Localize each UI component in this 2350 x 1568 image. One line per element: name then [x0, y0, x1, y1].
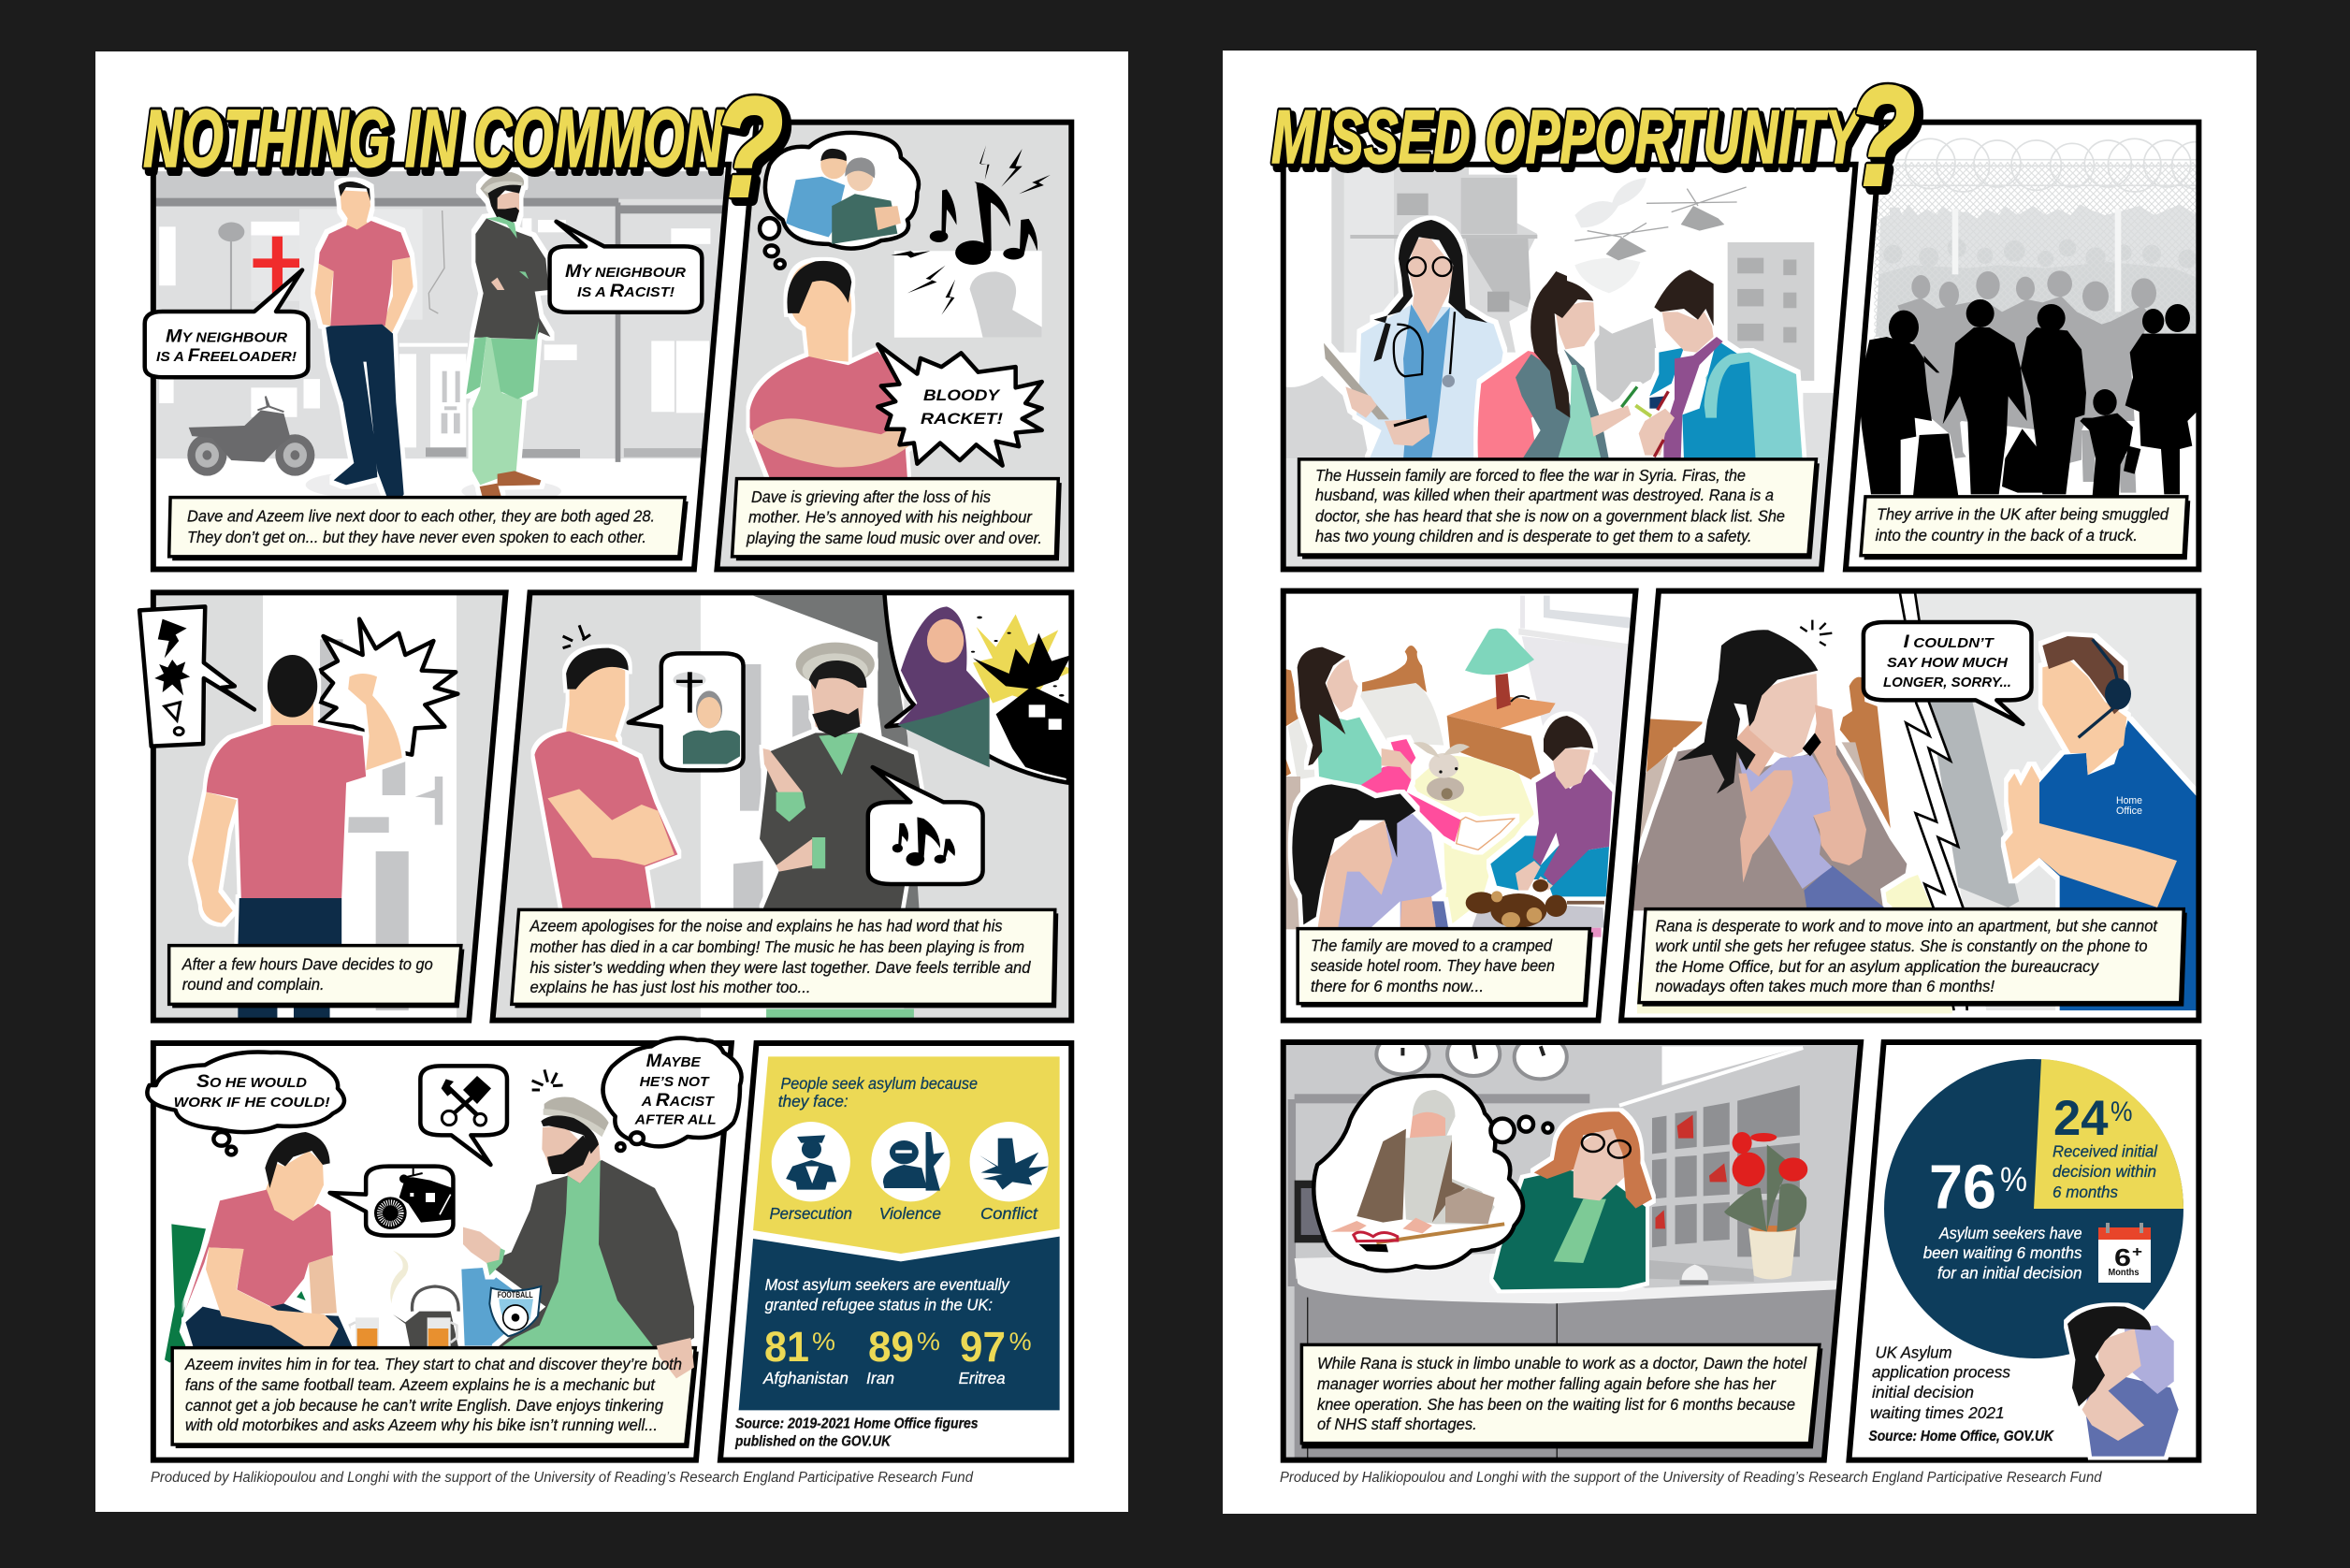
- icon: Dawn's glasses: [1582, 1134, 1631, 1158]
- icon: teddy bear: [1466, 879, 1567, 928]
- chart title: UK asylum application process: initial decision: [1872, 1383, 1974, 1401]
- thought bubble: mother who has fallen: [1313, 1076, 1552, 1270]
- figure: Azeem seated: [463, 1096, 694, 1349]
- stat: Iran 89%: 89: [868, 1323, 914, 1371]
- figure: Azeem explaining: [760, 643, 921, 909]
- panel frame: [1849, 1042, 2198, 1460]
- speech bubble: tools: [420, 1066, 507, 1165]
- icon: stress marks above Rana: [1800, 620, 1832, 646]
- props: pillow, cushion, tea set: [165, 1224, 543, 1363]
- stat: Afghanistan 81%: 81: [764, 1323, 809, 1371]
- panel border: [1846, 123, 2198, 570]
- heading: Nothing in common: ?: [714, 68, 783, 225]
- stat: 24% received initial decision within 6 months: [2053, 1091, 2158, 1201]
- icon: calendar 6+ months: Months: [2109, 1268, 2140, 1278]
- silhouettes: black refugees in front: [1859, 299, 2197, 496]
- background: split room and office: [1618, 580, 2211, 1017]
- thought bubble: maybe he's not a racist after all: HE’S NOT: [640, 1075, 710, 1090]
- speech burst: bloody racket: [878, 344, 1042, 466]
- figure: Azeem: [466, 172, 550, 501]
- ruined city background: [1284, 166, 1747, 458]
- caption: knee operation. She has been on the waiting list for 6 months because: [1317, 1395, 1795, 1414]
- heading: Missed opportunity: MISSED OPPORTUNITY: [1271, 95, 1864, 180]
- chart title: UK asylum application process: Source: Home Office, GOV.UK: [1869, 1429, 2055, 1445]
- panel: tea and conversation: [147, 1038, 742, 1461]
- caption: seaside hotel room. They have been: [1311, 956, 1555, 975]
- panel: Hussein family flee Syria: [1284, 165, 1861, 573]
- silhouettes: grey refugees behind: [1897, 270, 2156, 493]
- caption: They arrive in the UK after being smuggled: [1877, 505, 2169, 524]
- figure: Rana with head in hand: [2067, 1306, 2179, 1457]
- stat: 24% received initial decision within 6 months: 24: [2053, 1091, 2109, 1146]
- caption: into the country in the back of a truck.: [1875, 526, 2138, 544]
- panel border: [1284, 591, 1635, 1021]
- stat: 76% waiting 6 months: [1923, 1153, 2082, 1283]
- caption: nowadays often takes much more than 6 months!: [1656, 977, 1995, 995]
- panel border: [1284, 1042, 1861, 1460]
- hotel room background: [1285, 595, 1631, 937]
- speech bubble: mother and cross: [629, 653, 744, 770]
- stat: Iran 89%: [866, 1323, 940, 1387]
- heading: Missed opportunity: MISSED OPPORTUNITY: [1271, 95, 1864, 180]
- caption: [172, 1338, 699, 1448]
- caption: work until she gets her refugee status. She is constantly on the phone to: [1656, 936, 2148, 955]
- heading: Nothing in common: [143, 68, 789, 229]
- lightning divider: [1897, 580, 1967, 1010]
- stat: 76% waiting 6 months: for an initial decision: [1937, 1264, 2082, 1283]
- stat: 76% waiting 6 months: Asylum seekers have: [1938, 1224, 2082, 1242]
- caption: cannot get a job because he can’t write English. Dave enjoys tinkering: [185, 1396, 663, 1415]
- panel: asylum waiting times pie chart: [1849, 1042, 2198, 1460]
- stat: 24% received initial decision within 6 months: Received initial: [2053, 1142, 2158, 1161]
- caption: with old motorbikes and asks Azeem why his bike isn’t running well...: [185, 1416, 658, 1434]
- caption: The Hussein family are forced to flee the war in Syria. Firas, the: [1315, 466, 1746, 485]
- stat: Eritrea 97%: Eritrea: [959, 1369, 1006, 1387]
- figure: Dave from behind: [192, 655, 402, 948]
- panel: cramped seaside hotel room: [1282, 589, 1672, 1026]
- figure: Home Office call handler: [2005, 636, 2198, 1010]
- shirt logo: Home Office: [2116, 795, 2142, 817]
- stat: Afghanistan 81%: [762, 1323, 849, 1387]
- stat: Afghanistan 81%: %: [812, 1328, 835, 1356]
- caption: [169, 498, 689, 560]
- speech bubble: I couldn't say how much longer: SAY HOW MUCH: [1887, 656, 2009, 671]
- stat: 24% received initial decision within 6 months: decision within: [2053, 1162, 2156, 1181]
- caption: They don’t get on... but they have never even spoken to each other.: [187, 528, 646, 546]
- caption: While Rana is stuck in limbo unable to work as a doctor, Dawn the hotel: [1317, 1354, 1807, 1372]
- stat: Iran 89%: Iran: [866, 1369, 894, 1387]
- caption: round and complain.: [182, 975, 325, 994]
- icon: potted plant with red flowers: [1724, 1132, 1807, 1279]
- figure: daughter with backpack: [1478, 271, 1637, 460]
- speech bubble: music notes: [868, 767, 983, 884]
- heading: Nothing in common: NOTHING IN COMMON: [143, 94, 724, 184]
- caption: his sister’s wedding when they were last together. Dave feels terrible and: [529, 958, 1032, 977]
- panel: why people seek asylum: [720, 1043, 1071, 1460]
- thought bubble: so he would work if he could: [147, 1052, 344, 1154]
- figure: Dave: [315, 181, 413, 501]
- stat: Eritrea 97%: 97: [960, 1323, 1006, 1371]
- panel border: [1284, 165, 1855, 570]
- source note: Source: 2019-2021 Home Office figures: [735, 1416, 979, 1432]
- shirt logo: Home Office: Home: [2116, 795, 2142, 806]
- caption: mother. He’s annoyed with his neighbour: [748, 508, 1033, 527]
- caption: [1299, 459, 1820, 559]
- heading: Missed opportunity: ?: [1854, 61, 1921, 218]
- figure: girl on bed: [1298, 647, 1514, 849]
- panel: Dave grieving, loud music: [717, 123, 1075, 573]
- caption: [1639, 909, 2187, 1007]
- street background: [155, 171, 724, 462]
- heading: Nothing in common: ?: [714, 68, 783, 225]
- caption: Dave is grieving after the loss of his: [751, 487, 991, 506]
- heading: Missed opportunity: MISSED OPPORTUNITY: [1275, 100, 1867, 184]
- speech bubble: I couldn't say how much longer: I COULDN’T: [1904, 632, 1995, 652]
- pie chart: 76% vs 24%: [1884, 1059, 2183, 1358]
- heading: Missed opportunity: ?: [1849, 57, 1915, 214]
- caption: husband, was killed when their apartment was destroyed. Rana is a: [1315, 486, 1774, 504]
- icon: football badge: [489, 1286, 541, 1336]
- caption: The family are moved to a cramped: [1311, 936, 1553, 955]
- caption: Rana is desperate to work and to move into an apartment, but she cannot: [1656, 917, 2158, 936]
- panel border: [153, 1043, 732, 1460]
- room background: [153, 592, 508, 1022]
- footer credit: right page: Produced by Halikiopoulou and Longhi with the support of the University of Reading’s Research England Participative Research Fund: [1280, 1470, 2103, 1486]
- caption: manager worries about her mother falling again before she has her: [1317, 1374, 1777, 1393]
- icon: three wall clocks: [1376, 1032, 1567, 1079]
- icon: headset: [2079, 639, 2131, 737]
- yellow section: people seek asylum because they face: Persecution: [769, 1204, 852, 1223]
- stat: Afghanistan 81%: Afghanistan: [762, 1369, 849, 1387]
- figure: Rana with hair over face: [1292, 784, 1448, 929]
- panel: Rana phones the Home Office: [1618, 580, 2211, 1021]
- panel border: [153, 165, 729, 570]
- chart title: UK asylum application process: UK Asylum: [1875, 1343, 1951, 1362]
- icon: violence masked gunman: [871, 1122, 950, 1201]
- caption: [1298, 929, 1593, 1008]
- figure: Dawn at the desk: [1493, 1111, 1652, 1289]
- icon: conflict explosion bomb: [970, 1122, 1049, 1201]
- speech burst: bloody racket: RACKET!: [921, 410, 1003, 428]
- stat: Eritrea 97%: [959, 1323, 1032, 1387]
- figure: Rana on the phone: [1628, 630, 1907, 910]
- chart title: UK asylum application process: application process: [1872, 1363, 2010, 1382]
- panel base: [1285, 242, 1834, 567]
- stat: 24% received initial decision within 6 months: %: [2111, 1096, 2133, 1127]
- speech bubble: motorbike: [330, 1167, 453, 1236]
- room background: [153, 1043, 734, 1461]
- thought bubble: maybe he's not a racist after all: A RACIST: [641, 1091, 715, 1111]
- panel border: [717, 123, 1071, 570]
- chart title: UK asylum application process: waiting times 2021: [1870, 1403, 2005, 1422]
- source note: published on the GOV.UK: [734, 1434, 892, 1450]
- panel border: [153, 592, 506, 1021]
- yellow section: people seek asylum because they face: People seek asylum because: [780, 1074, 978, 1093]
- burst: thump on the wall: [320, 619, 457, 755]
- chart title: UK asylum application process: [1869, 1343, 2055, 1445]
- yellow section: people seek asylum because they face: Conflict: [980, 1204, 1038, 1223]
- figure: Rana the doctor: [1324, 220, 1503, 460]
- caption: After a few hours Dave decides to go: [181, 955, 433, 974]
- thought bubble: maybe he's not a racist after all: AFTER ALL: [634, 1113, 717, 1128]
- speech bubble: my neighbour is a racist: MY NEIGHBOUR: [565, 262, 687, 282]
- icon: music notes and lightning: [891, 145, 1051, 315]
- thought bubble: maybe he's not a racist after all: MAYBE: [646, 1052, 702, 1071]
- caption: [1861, 497, 2190, 559]
- navy section: refugee status grant rates: Most asylum seekers are eventually: [765, 1275, 1010, 1294]
- icon: calendar 6+ months: 6: [2114, 1243, 2131, 1271]
- panel: Dave bangs on the wall: [139, 592, 508, 1022]
- icon: alarm marks above Azeem: [532, 1069, 563, 1090]
- caption: doctor, she has heard that she is now on a government black list. She: [1315, 507, 1785, 526]
- yellow section: people seek asylum because they face: they face:: [778, 1092, 849, 1111]
- stat: 76% waiting 6 months: 76: [1929, 1153, 1996, 1223]
- speech bubble: my neighbour is a freeloader: MY NEIGHBOUR: [166, 327, 288, 346]
- icon: calendar 6+ months: [2098, 1223, 2151, 1283]
- source note: [734, 1416, 979, 1450]
- caption: [1301, 1344, 1822, 1448]
- caption: explains he has just lost his mother too...: [529, 978, 810, 996]
- icon: football badge: FOOTBALL: [498, 1290, 533, 1299]
- heading: Missed opportunity: [1271, 57, 1921, 218]
- heading: Nothing in common: NOTHING IN COMMON: [143, 94, 724, 184]
- caption: [512, 909, 1058, 1008]
- page: Nothing in common: [95, 51, 1128, 1512]
- thought bubble: so he would work if he could: WORK IF HE COULD!: [174, 1096, 330, 1111]
- hallway background: [493, 592, 1073, 1022]
- stat: 24% received initial decision within 6 months: 6 months: [2053, 1183, 2118, 1201]
- speech bubble: my neighbour is a racist: IS A RACIST!: [577, 282, 675, 301]
- caption: Dave and Azeem live next door to each other, they are both aged 28.: [187, 507, 655, 526]
- caption: the Home Office, but for an asylum application the bureaucracy: [1656, 957, 2099, 976]
- figure: Dave with folded arms: [534, 648, 677, 909]
- caption: [169, 946, 464, 1008]
- panel: Dawn the hotel manager: [1284, 1032, 1865, 1462]
- panel: Dave and Azeem outside their houses: [145, 165, 731, 573]
- caption: Azeem invites him in for tea. They start to chat and discover they’re both: [184, 1355, 682, 1373]
- navy section: refugee status grant rates: granted refugee status in the UK:: [765, 1296, 993, 1314]
- caption: of NHS staff shortages.: [1317, 1415, 1477, 1433]
- caption: fans of the same football team. Azeem explains he is a mechanic but: [185, 1375, 656, 1394]
- caption: has two young children and is desperate to get them to a safety.: [1315, 527, 1752, 545]
- yellow section: people seek asylum because they face: [753, 1056, 1060, 1254]
- details: glasses, stethoscope and pen: [1394, 257, 1455, 426]
- page: Missed opportunity: [1223, 51, 2256, 1514]
- shirt logo: Home Office: Office: [2116, 806, 2142, 817]
- figure: Dave seated: [185, 1132, 353, 1347]
- speech bubble: I couldn't say how much longer: [1864, 622, 2031, 724]
- caption: Azeem apologises for the noise and explains he has had word that his: [529, 917, 1003, 936]
- panel border: [1621, 591, 2198, 1021]
- panel frame: [720, 1043, 1071, 1460]
- speech bubble: my neighbour is a freeloader: [145, 270, 308, 377]
- panel border: [493, 592, 1071, 1021]
- heading: Missed opportunity: ?: [1849, 57, 1915, 214]
- figure: boy sitting: [1490, 716, 1612, 896]
- room background: [717, 123, 1075, 573]
- icon: persecution officer: [772, 1122, 850, 1201]
- caption: there for 6 months now...: [1311, 977, 1484, 995]
- icon: alarm marks above Dave: [563, 625, 590, 648]
- speech bubble: my neighbour is a racist: [550, 222, 702, 312]
- caption: [733, 479, 1062, 560]
- footer credit: left page: Produced by Halikiopoulou and Longhi with the support of the University of Reading’s Research England Participative Research Fund: [151, 1470, 974, 1486]
- speech bubble: my neighbour is a freeloader: IS A FREELOADER!: [156, 346, 297, 366]
- thought bubble: so he would work if he could: SO HE WOULD: [196, 1072, 308, 1092]
- figure: son with backpack: [1635, 269, 1803, 460]
- flashback bubble: mother and car bomb: [884, 592, 1075, 783]
- hotel reception background: [1284, 1042, 1865, 1462]
- yellow section: people seek asylum because they face: Violence: [879, 1204, 941, 1223]
- caption: mother has died in a car bombing! The music he has been playing is from: [529, 937, 1024, 956]
- stat: Iran 89%: %: [917, 1328, 940, 1356]
- thought bubble: maybe he's not a racist after all: [602, 1038, 742, 1151]
- speech box: angry symbols: [139, 606, 254, 747]
- strips of colour below the caption: [1327, 929, 1606, 1020]
- navy section: refugee status grant rates: [739, 1237, 1060, 1410]
- stat: 76% waiting 6 months: been waiting 6 months: [1923, 1243, 2082, 1262]
- icon: motorbike: [187, 397, 314, 476]
- heading: Nothing in common: NOTHING IN COMMON: [147, 98, 728, 189]
- speech bubble: I couldn't say how much longer: LONGER, SORRY...: [1883, 675, 2011, 690]
- panel: Azeem apologises: [493, 592, 1075, 1022]
- speech burst: bloody racket: BLOODY: [923, 386, 1001, 404]
- fence, razor wire and distant crowd: [1874, 138, 2197, 339]
- panel: smuggled into the UK: [1843, 122, 2219, 573]
- icon: calendar 6+ months: +: [2132, 1244, 2142, 1260]
- figure: Dave with crossed arms: [750, 261, 910, 478]
- icon: toy rabbit: [1417, 744, 1466, 801]
- stat: Eritrea 97%: %: [1009, 1328, 1032, 1356]
- caption: playing the same loud music over and over.: [746, 529, 1042, 547]
- heading: Nothing in common: ?: [719, 72, 789, 229]
- stat: 76% waiting 6 months: %: [2000, 1160, 2027, 1198]
- thought bubble: Dave and his mother: [760, 133, 919, 269]
- house door and windows: [299, 209, 580, 502]
